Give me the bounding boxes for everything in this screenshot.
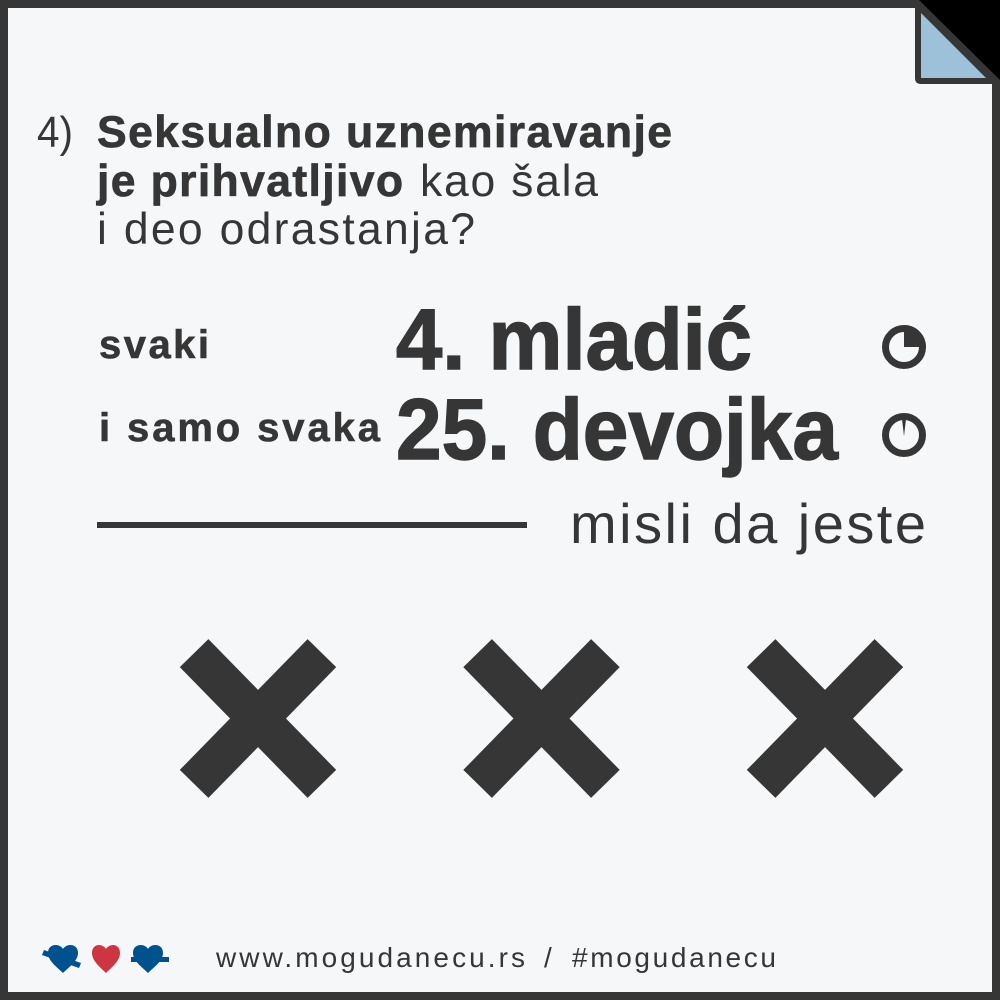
statistic: 25. devojka: 25. devojka (396, 382, 839, 478)
icon: folded corner (921, 13, 986, 78)
question number: 4) (37, 108, 73, 157)
icon: cross 2 (478, 653, 605, 784)
icon: red heart (92, 945, 120, 973)
icon: sliver clock (886, 415, 922, 454)
divider line (97, 522, 527, 528)
heading (96, 108, 672, 254)
footer website: www.mogudanecu.rs (215, 942, 525, 973)
footer separator: / (544, 942, 552, 973)
icon: quarter clock (886, 325, 926, 366)
heading: kao šala (420, 157, 598, 206)
icon: cross 1 (194, 653, 322, 784)
heading: i deo odrastanja? (97, 205, 475, 254)
icon: blue heart with arrow horizontal (131, 945, 169, 973)
icon: cross 3 (761, 653, 889, 784)
statistic: 4. mladić: 4. mladić (396, 292, 752, 388)
heading: je prihvatljivo (96, 157, 403, 206)
label: i samo svaka: i samo svaka (99, 406, 381, 450)
footer hashtag: #mogudanecu (572, 942, 776, 973)
heading: Seksualno uznemiravanje (97, 108, 672, 157)
caption: misli da jeste: misli da jeste (570, 492, 926, 555)
icon: blue heart with arrow tilted (42, 945, 81, 973)
label: svaki: svaki (99, 323, 209, 367)
